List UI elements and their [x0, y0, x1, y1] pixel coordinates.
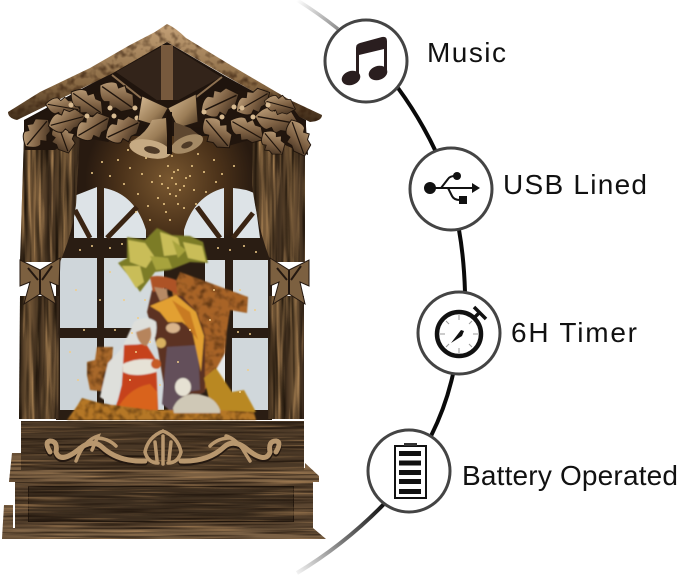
label: USB Lined: USB Lined: [503, 169, 647, 200]
holly garland: [16, 74, 316, 161]
inset panel: [28, 486, 294, 522]
label: Battery Operated: Battery Operated: [462, 460, 678, 491]
icon: stopwatch: [437, 307, 486, 356]
upper box: [21, 421, 304, 470]
lamb: [173, 378, 220, 413]
straw and ground: [67, 368, 256, 420]
glitter snow: [70, 150, 256, 392]
icon: music note: [340, 37, 389, 88]
center post: [161, 45, 173, 105]
right curtain: [252, 135, 309, 419]
Mary: [100, 318, 161, 411]
icon: USB symbol: [424, 172, 480, 204]
label: Music: Music: [427, 37, 506, 68]
connecting arc: [297, 0, 465, 573]
feature: music: [325, 20, 506, 102]
bottom plate: [2, 505, 326, 539]
icon circle: [325, 20, 407, 102]
base: [2, 421, 326, 539]
feature: battery: [368, 430, 678, 512]
palm tree leaves: [118, 228, 208, 292]
feature: timer: [418, 292, 637, 374]
ledge: [9, 453, 319, 482]
feature: USB: [410, 148, 647, 230]
bow and bells: [128, 94, 206, 162]
label: 6H Timer: 6H Timer: [511, 317, 637, 348]
icon: battery: [395, 443, 426, 498]
left curtain: [19, 135, 80, 419]
icon circle: [418, 292, 500, 374]
lantern interior and windows: [50, 120, 280, 420]
nativity figures: [67, 228, 256, 420]
roof band: [8, 24, 322, 122]
stable wall: [172, 272, 248, 392]
lantern: [2, 24, 326, 539]
icon circle: [368, 430, 450, 512]
scroll ornament: [47, 431, 279, 464]
icon circle: [410, 148, 492, 230]
roof and gable: [8, 24, 322, 136]
gable: [24, 42, 306, 136]
Joseph: [147, 276, 205, 412]
lower box: [15, 482, 313, 528]
wood cross: [87, 347, 113, 392]
